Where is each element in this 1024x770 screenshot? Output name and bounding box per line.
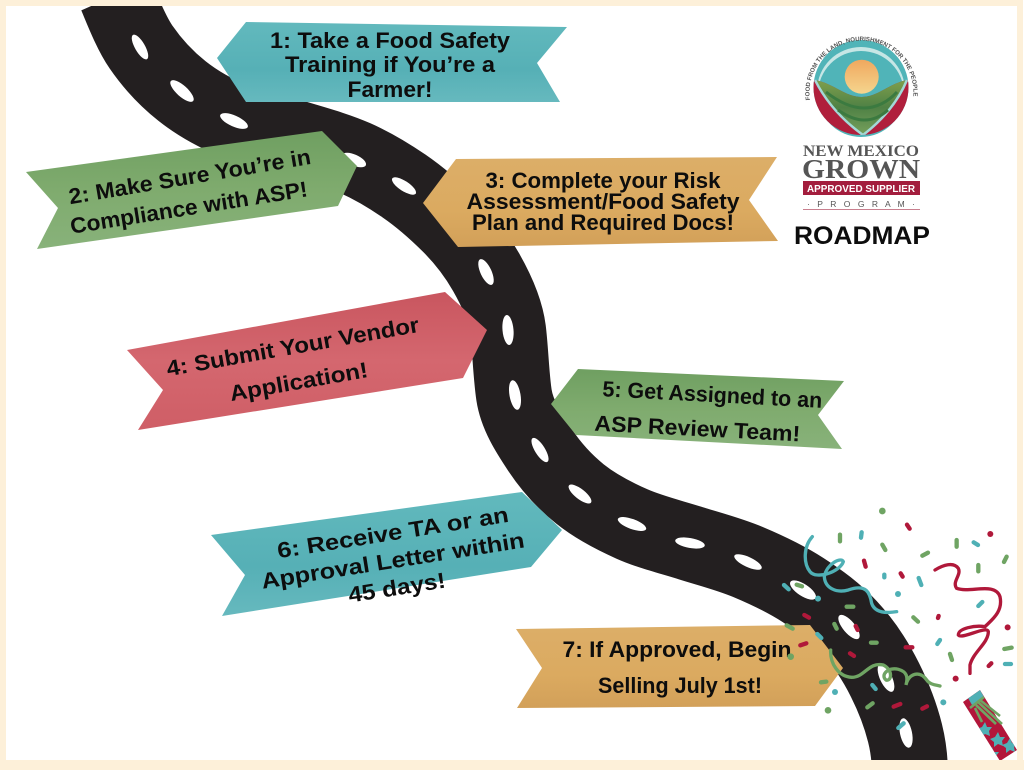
logo wordmark: APPROVED SUPPLIER bbox=[807, 183, 915, 195]
banner 4: vendor application bbox=[127, 292, 487, 430]
banner 6: TA or approval letter bbox=[211, 492, 562, 616]
logo wordmark: GROWN bbox=[802, 154, 921, 184]
banner 1: food safety training bbox=[217, 22, 567, 102]
banner 1: food safety training: Training if You’re a bbox=[285, 52, 496, 77]
banner 2: compliance with ASP: Compliance with ASP! bbox=[68, 176, 309, 239]
icon: party popper bbox=[963, 690, 1017, 762]
heading: roadmap: ROADMAP bbox=[794, 222, 930, 250]
banner 6: TA or approval letter: 45 days! bbox=[346, 568, 447, 608]
banner 7: begin selling bbox=[516, 625, 843, 708]
banner 7: begin selling: Selling July 1st! bbox=[598, 673, 762, 698]
confetti and streamers bbox=[784, 508, 1012, 728]
road bbox=[116, 0, 915, 770]
banner 1: food safety training: 1: Take a Food Safety bbox=[270, 28, 511, 53]
banner 5: review team bbox=[551, 369, 844, 449]
logo wordmark bbox=[802, 143, 921, 210]
banner 3: risk assessment and documents bbox=[423, 157, 778, 247]
banner 6: TA or approval letter: Approval Letter within bbox=[260, 527, 526, 594]
banner 5: review team: ASP Review Team! bbox=[594, 411, 801, 446]
banner 4: vendor application: Application! bbox=[228, 357, 370, 406]
banner 3: risk assessment and documents: Assessment/Food Safety bbox=[466, 189, 740, 214]
banner 1: food safety training: Farmer! bbox=[348, 77, 432, 102]
banner 2: compliance with ASP: 2: Make Sure You’re in bbox=[67, 144, 313, 209]
banner 3: risk assessment and documents: Plan and Required Docs! bbox=[472, 210, 734, 235]
logo ring text: FOOD FROM THE LAND, NOURISHMENT FOR THE PEOPLE bbox=[805, 36, 918, 100]
banner 7: begin selling: 7: If Approved, Begin bbox=[562, 637, 792, 662]
logo wordmark: NEW MEXICO bbox=[803, 143, 919, 160]
banner 5: review team: 5: Get Assigned to an bbox=[602, 376, 823, 413]
icon: logo emblem bbox=[811, 40, 911, 140]
logo wordmark: · P R O G R A M · bbox=[807, 199, 915, 209]
banner 3: risk assessment and documents: 3: Complete your Risk bbox=[486, 168, 721, 193]
banner 6: TA or approval letter: 6: Receive TA or an bbox=[275, 502, 510, 563]
logo: New Mexico Grown bbox=[802, 36, 921, 210]
banner 2: compliance with ASP bbox=[26, 131, 357, 249]
banner 4: vendor application: 4: Submit Your Vendor bbox=[164, 312, 421, 381]
